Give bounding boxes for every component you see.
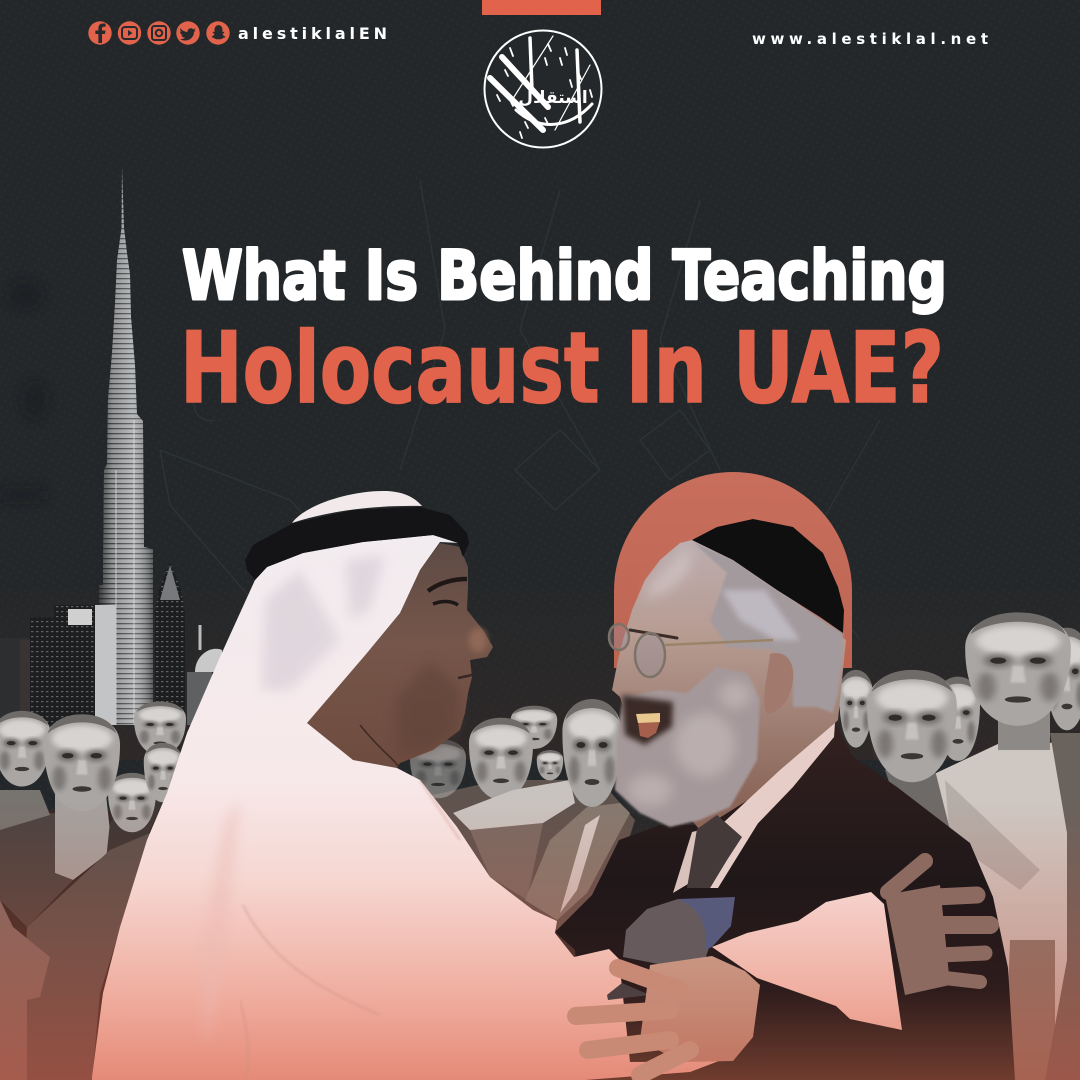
- left towers: [0, 605, 116, 725]
- skyline: Burj Khalifa and towers: [0, 167, 222, 725]
- sleeve cuff: [712, 892, 902, 1030]
- crowd bottom tint: [0, 800, 1080, 1080]
- ghutra shadows: [200, 555, 385, 1050]
- logo: calligraphy emblem: استقلال: [518, 88, 588, 108]
- robe folds: [240, 780, 460, 1080]
- grey hair: [693, 542, 843, 713]
- social icons: [88, 21, 230, 45]
- shirt collar: [710, 723, 835, 888]
- icon: snapchat: [206, 21, 230, 45]
- lip: [458, 675, 472, 678]
- neck crease: [360, 725, 398, 766]
- collar left strip: [673, 830, 700, 893]
- icon: instagram: [147, 21, 171, 45]
- kandura robe: [200, 723, 719, 1080]
- icon: youtube: [118, 21, 141, 45]
- middle crowd: [410, 699, 635, 930]
- eyebrow: [428, 579, 467, 591]
- lower background tint: [0, 560, 1080, 760]
- forehead highlight: [645, 545, 690, 600]
- kippah: [692, 519, 844, 633]
- website: www.alestiklal.net: [752, 30, 988, 48]
- icon: facebook: [88, 21, 112, 45]
- glasses: [609, 624, 773, 677]
- rabbi figure: [555, 519, 1015, 1080]
- headdress (ghutra): [92, 535, 460, 1080]
- beard highlights: [628, 681, 751, 806]
- dark smudge left: [0, 283, 45, 500]
- head and neck: [612, 540, 846, 830]
- hand on sleeve: [576, 956, 760, 1075]
- eye: [433, 601, 458, 605]
- hair highlight: [722, 590, 800, 640]
- black suit: [555, 723, 1015, 1080]
- left crowd: [0, 702, 190, 1080]
- nose highlight: [469, 628, 487, 652]
- salmon arch: [614, 472, 852, 668]
- eyebrow: [630, 630, 677, 638]
- Burj Khalifa tower: [99, 167, 153, 725]
- black agal: [245, 507, 469, 580]
- beard: [615, 667, 760, 827]
- right hand on back: [885, 861, 990, 995]
- right crowd: [839, 612, 1080, 1080]
- logo: calligraphy emblem: [484, 30, 602, 148]
- right pointed tower: [155, 562, 222, 725]
- social handle: alestiklalEN: [238, 24, 387, 43]
- Emirati man: [92, 491, 719, 1080]
- cheek shadow: [395, 660, 460, 755]
- top accent bar: [482, 0, 601, 15]
- hands and held cap: [576, 861, 990, 1075]
- white cap: [292, 491, 422, 523]
- ear: [764, 653, 793, 714]
- crowd of prisoners: [0, 612, 1080, 1080]
- icon: twitter: [176, 21, 200, 45]
- background sketch watermark: [160, 180, 880, 700]
- held cap: [607, 897, 735, 1000]
- neck and face: [300, 543, 493, 768]
- mouth and teeth: [636, 713, 660, 738]
- moustache dark: [622, 695, 673, 745]
- tie: [687, 815, 742, 888]
